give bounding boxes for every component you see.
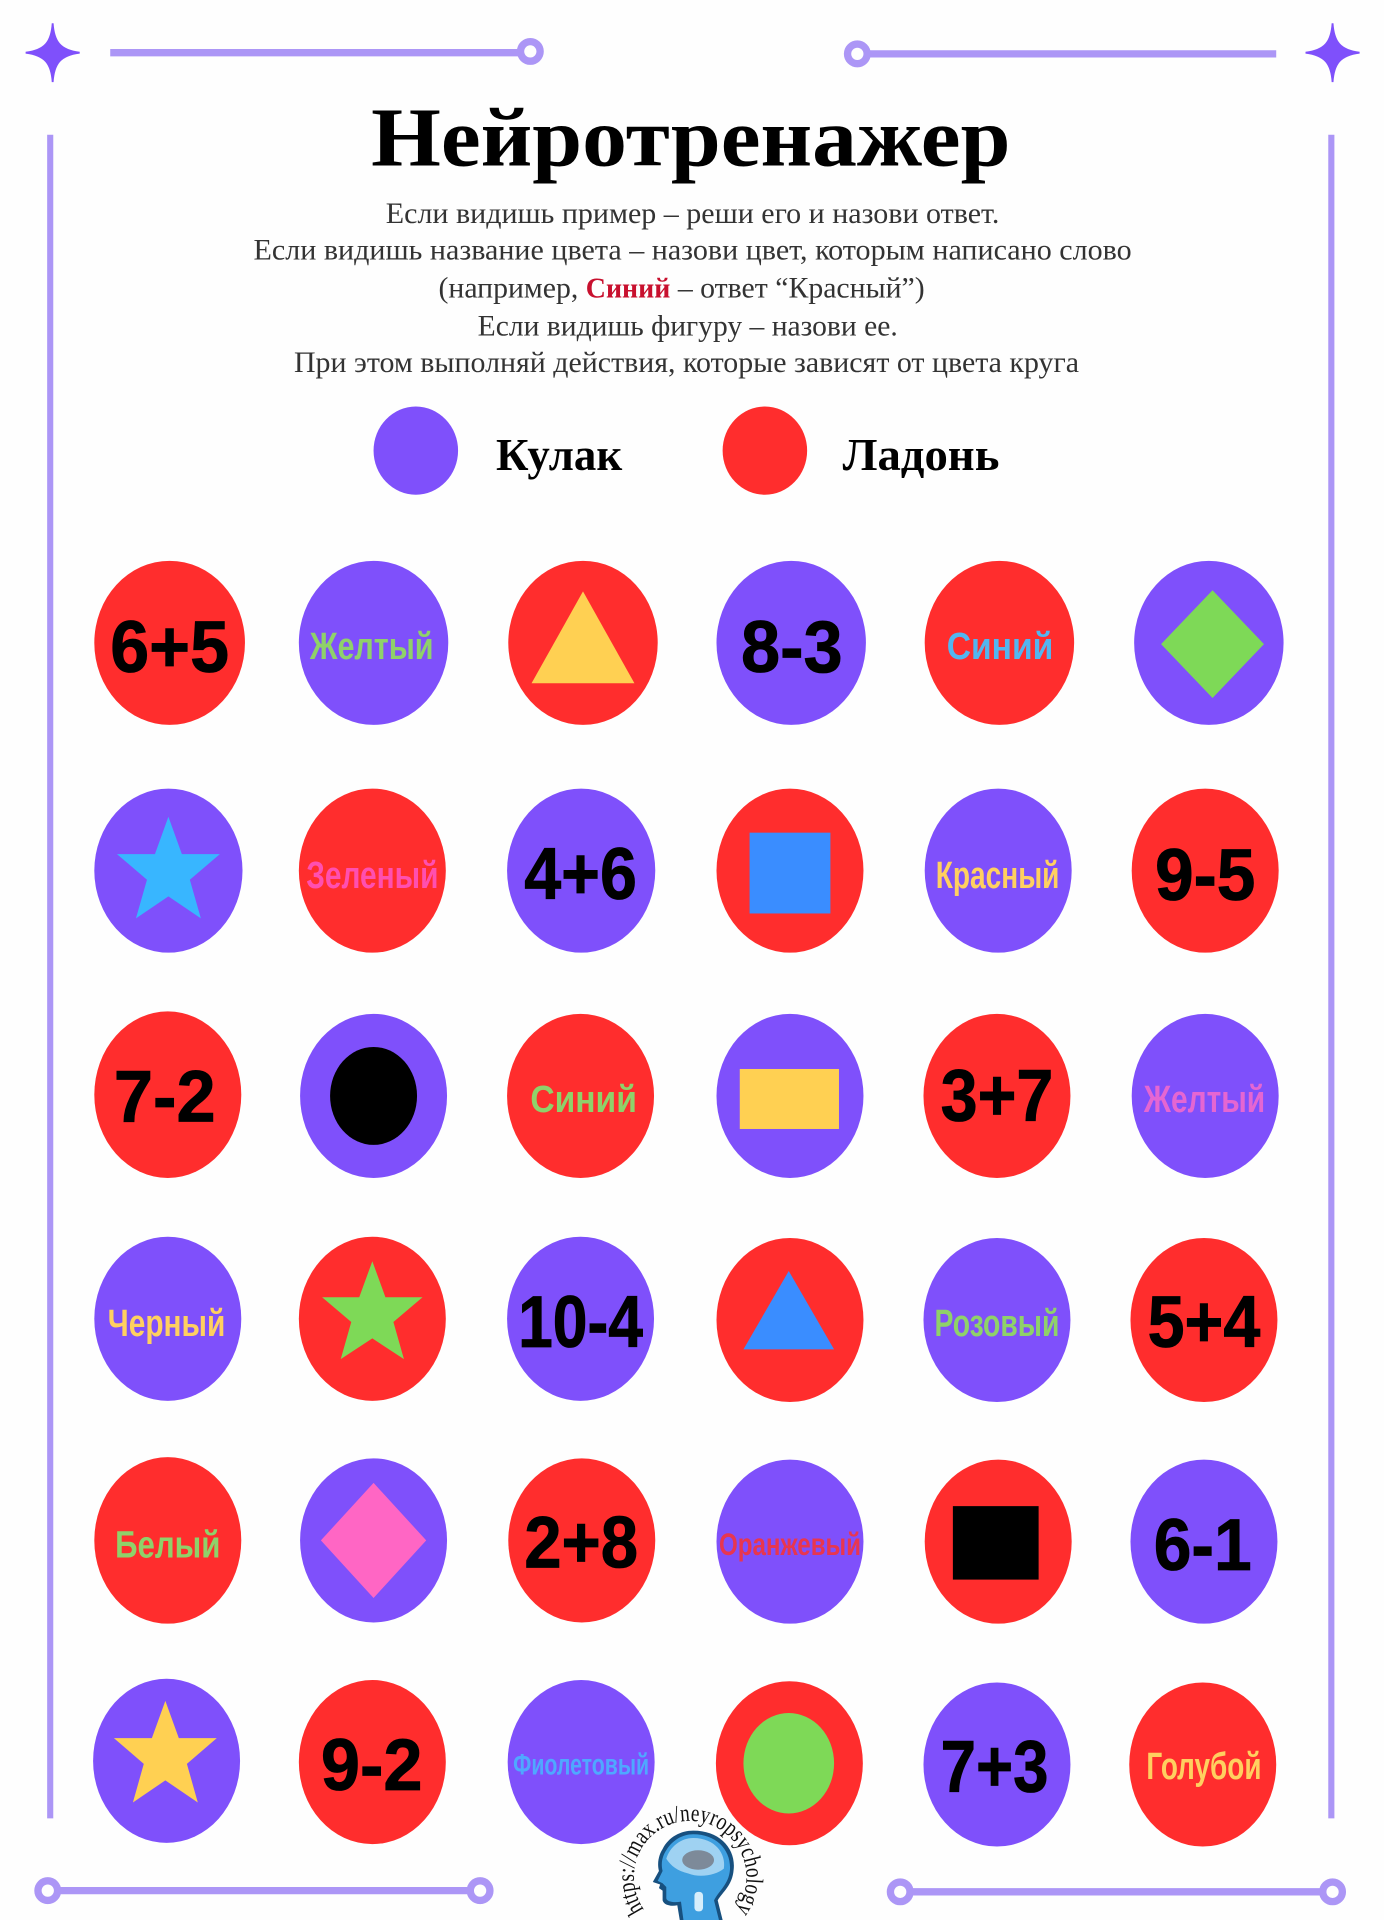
icon: top right star [1306, 23, 1360, 82]
circle: word Белый: Белый [115, 1525, 220, 1567]
legend: red means palm [723, 407, 999, 495]
icon: top left star [26, 23, 80, 82]
circle: 3+7: 3+7 [941, 1053, 1053, 1136]
circle: yellow rectangle [716, 1014, 863, 1178]
circle: word Красный [925, 789, 1072, 953]
circle: word Желтый: Желтый [309, 626, 434, 668]
circle: black square [925, 1460, 1072, 1624]
circle: blue triangle [716, 1238, 863, 1402]
circle: word Желтый pink [1132, 1014, 1279, 1178]
circle: word Зеленый: Зеленый [306, 855, 438, 897]
circle: 3+7 [923, 1014, 1070, 1178]
circle: yellow star [93, 1679, 240, 1843]
circle: 4+6: 4+6 [524, 832, 637, 915]
circle: 7+3: 7+3 [941, 1724, 1048, 1807]
circle: 7+3 [923, 1682, 1070, 1847]
circle: 9-5: 9-5 [1155, 833, 1255, 916]
circle: 10-4: 10-4 [518, 1280, 643, 1363]
circle: green circle [716, 1681, 863, 1845]
circle: blue star [94, 789, 243, 953]
circle: word Красный: Красный [936, 855, 1059, 897]
circle: 5+4 [1130, 1238, 1277, 1402]
instructions text block: Если видишь пример – реши его и назови ответ. [386, 197, 999, 230]
circle: 5+4: 5+4 [1148, 1280, 1260, 1363]
circle: 6-1 [1130, 1460, 1277, 1624]
circle: word Голубой [1129, 1682, 1276, 1847]
panel: circle grid [93, 561, 1284, 1847]
circle: word Оранжевый [716, 1460, 863, 1624]
circle: word Синий [925, 561, 1074, 725]
circle: 7-2: 7-2 [114, 1055, 216, 1138]
circle: word Желтый pink: Желтый [1143, 1079, 1265, 1121]
circle: 9-2 [299, 1680, 446, 1844]
circle: 6-1: 6-1 [1154, 1503, 1252, 1586]
circle: black circle [300, 1014, 447, 1178]
circle: 2+8: 2+8 [524, 1500, 638, 1583]
circle: blue square [716, 789, 863, 953]
circle: word Желтый [299, 561, 448, 725]
circle: green star [299, 1237, 446, 1401]
instructions text block: Если видишь название цвета – назови цвет, которым написано слово [254, 234, 1132, 267]
circle: word Синий green: Синий [530, 1079, 637, 1121]
circle: word Розовый: Розовый [935, 1303, 1059, 1345]
circle: 8-3 [716, 561, 866, 725]
circle: 6+5: 6+5 [110, 605, 229, 688]
circle: word Голубой: Голубой [1146, 1746, 1262, 1788]
circle: word Фиолетовый [508, 1680, 655, 1844]
circle: word Черный [94, 1237, 241, 1401]
instructions text block: (например, Синий – ответ “Красный”) [438, 272, 925, 305]
circle: 4+6 [507, 789, 655, 953]
instructions text block: Если видишь фигуру – назови ее. [478, 310, 898, 343]
legend: purple means fist: Кулак [496, 430, 623, 480]
circle: word Розовый [923, 1238, 1070, 1402]
circle: 10-4 [507, 1237, 654, 1401]
circle: word Фиолетовый: Фиолетовый [513, 1748, 649, 1781]
legend: purple means fist [374, 407, 623, 495]
circle: 9-5 [1132, 789, 1279, 953]
circle: 8-3: 8-3 [741, 605, 843, 688]
circle: 9-2: 9-2 [321, 1723, 423, 1806]
title: Нейротренажер [371, 92, 1010, 184]
circle: word Черный: Черный [108, 1303, 225, 1345]
circle: yellow triangle [508, 561, 658, 725]
circle: 7-2 [94, 1011, 241, 1178]
circle: word Оранжевый: Оранжевый [719, 1526, 861, 1562]
instructions text block [254, 197, 1132, 379]
circle: green diamond [1134, 561, 1284, 725]
circle: 6+5 [94, 561, 245, 725]
circle: word Синий: Синий [947, 626, 1053, 668]
instructions text block: При этом выполняй действия, которые зависят от цвета круга [294, 346, 1079, 379]
circle: word Белый [94, 1457, 241, 1624]
circle: 2+8 [508, 1458, 655, 1622]
legend: red means palm: Ладонь [843, 430, 999, 480]
logo: head with circular url: https://max.ru/neyropsychology [619, 1806, 764, 1918]
circle: pink diamond [300, 1458, 447, 1622]
circle: word Синий green [507, 1014, 654, 1178]
circle: word Зеленый [299, 789, 446, 953]
